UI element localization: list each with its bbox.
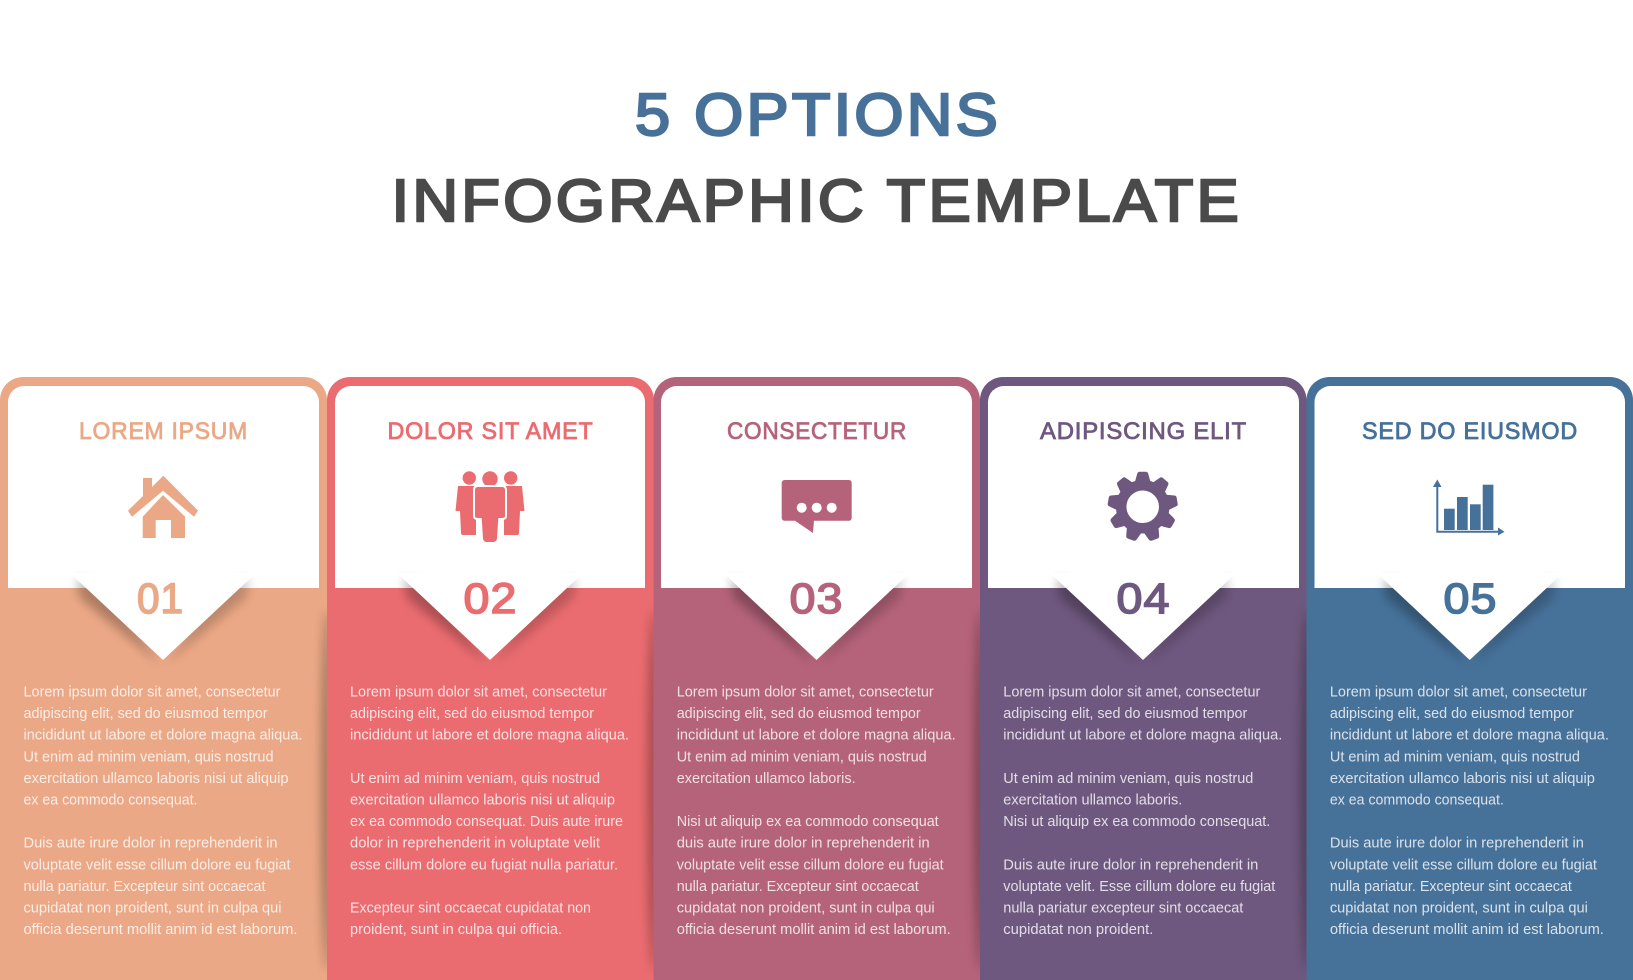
text block <box>1003 684 1282 938</box>
text block <box>24 684 302 938</box>
text block: dolor in reprehenderit in voluptate velit <box>350 835 601 852</box>
heading: LOREM IPSUM <box>79 418 248 445</box>
title line 1: 5 OPTIONS <box>635 82 1001 148</box>
text block <box>1330 684 1609 938</box>
text block: ex ea commodo consequat. <box>24 792 198 808</box>
text block: Nisi ut aliquip ex ea commodo consequat <box>677 813 939 830</box>
number: 04 <box>1116 575 1170 623</box>
icon: house <box>128 476 198 538</box>
text block: ex ea commodo consequat. Duis aute irure <box>350 813 623 830</box>
text block: Nisi ut aliquip ex ea commodo consequat. <box>1003 813 1270 830</box>
text block: exercitation ullamco laboris nisi ut aliquip <box>24 770 288 787</box>
text block: Ut enim ad minim veniam, quis nostrud <box>24 748 274 765</box>
text block: Ut enim ad minim veniam, quis nostrud <box>1330 748 1580 765</box>
panel: option 3 <box>654 377 986 980</box>
text block: Ut enim ad minim veniam, quis nostrud <box>677 748 927 765</box>
text block: nulla pariatur excepteur sint occaecat <box>1003 900 1244 916</box>
text block: esse cillum dolore eu fugiat nulla pariatur. <box>350 856 618 873</box>
number: 01 <box>137 575 184 623</box>
text block: Lorem ipsum dolor sit amet, consectetur <box>677 684 934 700</box>
text block: incididunt ut labore et dolore magna aliqua. <box>350 727 629 744</box>
text block: Lorem ipsum dolor sit amet, consectetur <box>24 684 281 700</box>
text block: Duis aute irure dolor in reprehenderit in <box>1330 835 1584 852</box>
text block: voluptate velit esse cillum dolore eu fugiat <box>1330 856 1598 873</box>
panel: option 4 <box>980 377 1312 980</box>
title <box>392 82 1242 234</box>
text block: adipiscing elit, sed do eiusmod tempor <box>24 705 268 722</box>
number: 03 <box>790 575 844 623</box>
text block: Ut enim ad minim veniam, quis nostrud <box>1003 770 1253 787</box>
text block: voluptate velit esse cillum dolore eu fugiat <box>24 856 291 873</box>
panel: option 2 <box>327 377 660 980</box>
text block: incididunt ut labore et dolore magna aliqua. <box>1330 727 1609 744</box>
text block: cupidatat non proident, sunt in culpa qui <box>677 900 935 916</box>
text block: nulla pariatur. Excepteur sint occaecat <box>24 878 266 895</box>
text block <box>677 684 956 938</box>
text block: proident, sunt in culpa qui officia. <box>350 921 562 938</box>
text block: nulla pariatur. Excepteur sint occaecat <box>677 878 919 895</box>
text block: adipiscing elit, sed do eiusmod tempor <box>677 705 921 722</box>
text block: incididunt ut labore et dolore magna aliqua. <box>677 727 956 744</box>
text block: officia deserunt mollit anim id est laborum. <box>24 921 298 938</box>
title line 2: INFOGRAPHIC TEMPLATE <box>392 168 1242 234</box>
text block: adipiscing elit, sed do eiusmod tempor <box>1003 705 1247 722</box>
text block: cupidatat non proident, sunt in culpa qui <box>24 900 282 916</box>
text block <box>350 684 629 938</box>
text block: voluptate velit esse cillum dolore eu fugiat <box>677 856 944 873</box>
number: 05 <box>1444 575 1498 623</box>
text block: cupidatat non proident. <box>1003 921 1153 938</box>
number: 02 <box>464 575 518 623</box>
text block: Ut enim ad minim veniam, quis nostrud <box>350 770 600 787</box>
text block: Lorem ipsum dolor sit amet, consectetur <box>350 684 607 700</box>
heading: DOLOR SIT AMET <box>388 418 594 445</box>
heading: SED DO EIUSMOD <box>1362 418 1578 445</box>
text block: voluptate velit. Esse cillum dolore eu fugiat <box>1003 878 1276 895</box>
text block: exercitation ullamco laboris nisi ut aliquip <box>1330 770 1595 787</box>
icon: speech bubble <box>782 480 852 533</box>
panel: option 5 <box>1306 377 1633 980</box>
text block: exercitation ullamco laboris. <box>1003 792 1182 808</box>
text block: officia deserunt mollit anim id est laborum. <box>677 921 951 938</box>
text block: ex ea commodo consequat. <box>1330 792 1504 808</box>
text block: cupidatat non proident, sunt in culpa qui <box>1330 900 1588 916</box>
text block: officia deserunt mollit anim id est laborum. <box>1330 921 1604 938</box>
text block: Duis aute irure dolor in reprehenderit in <box>24 835 278 852</box>
text block: duis aute irure dolor in reprehenderit in <box>677 835 930 852</box>
text block: incididunt ut labore et dolore magna aliqua. <box>24 727 302 744</box>
icon: gear <box>1107 472 1179 542</box>
text block: Lorem ipsum dolor sit amet, consectetur <box>1003 684 1260 700</box>
panel: option 1 <box>0 377 333 980</box>
text block: Excepteur sint occaecat cupidatat non <box>350 900 591 916</box>
icon: bar chart <box>1433 480 1504 536</box>
icon: people <box>456 471 524 542</box>
text block: exercitation ullamco laboris nisi ut aliquip <box>350 792 615 808</box>
text block: incididunt ut labore et dolore magna aliqua. <box>1003 727 1282 744</box>
text block: nulla pariatur. Excepteur sint occaecat <box>1330 878 1573 895</box>
text block: exercitation ullamco laboris. <box>677 770 856 787</box>
text block: Duis aute irure dolor in reprehenderit in <box>1003 856 1258 873</box>
heading: CONSECTETUR <box>727 418 907 445</box>
text block: Lorem ipsum dolor sit amet, consectetur <box>1330 684 1587 700</box>
heading: ADIPISCING ELIT <box>1040 418 1247 445</box>
text block: adipiscing elit, sed do eiusmod tempor <box>350 705 594 722</box>
text block: adipiscing elit, sed do eiusmod tempor <box>1330 705 1574 722</box>
